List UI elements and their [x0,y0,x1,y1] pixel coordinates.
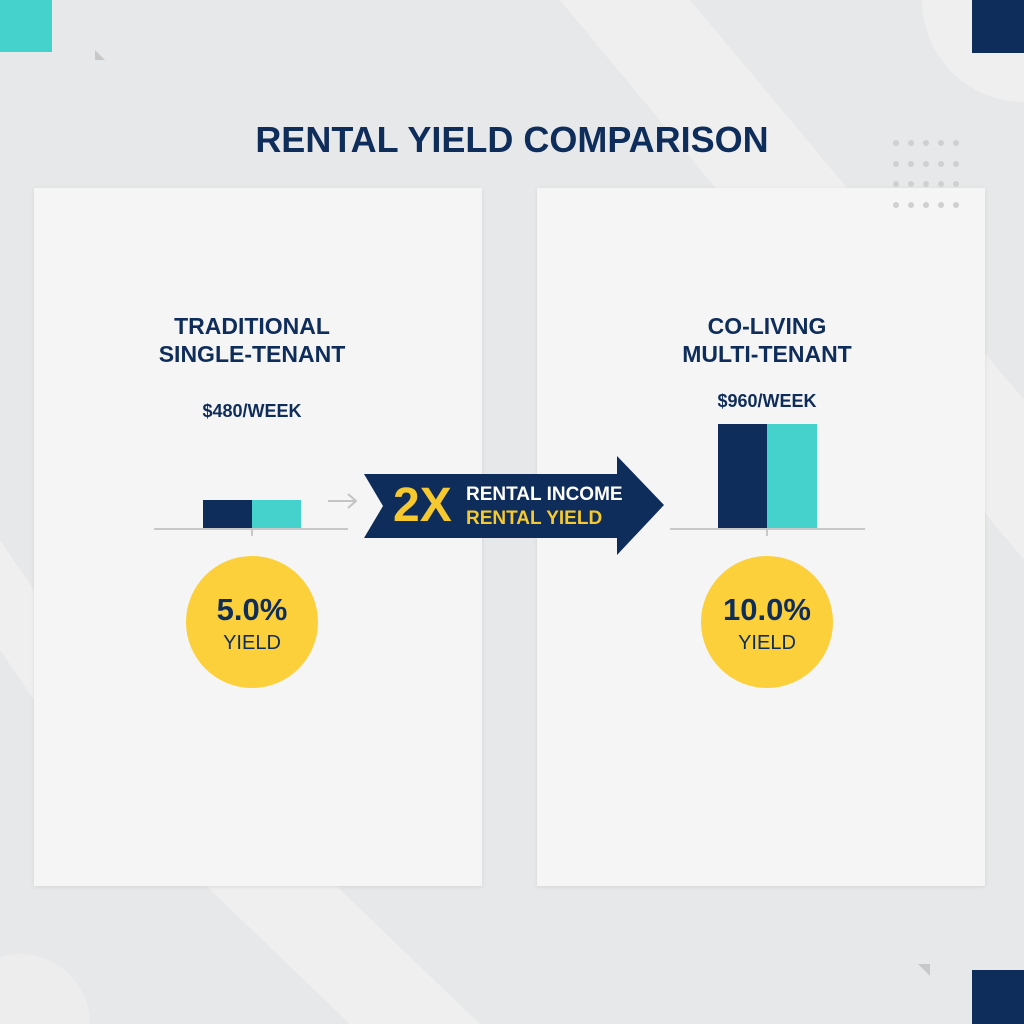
callout arrow: 2X: RENTAL YIELD [466,508,602,529]
yield circle: 10.0% [723,592,811,627]
callout arrow: 2X: RENTAL INCOME [466,484,623,505]
heading: SINGLE-TENANT [159,341,345,367]
callout arrow: 2X [364,456,664,555]
yield circle: YIELD [223,632,281,654]
bar chart [154,500,348,536]
panel: traditional [34,188,482,886]
heading [159,313,346,367]
price: $480/WEEK [202,401,302,421]
title: RENTAL YIELD COMPARISON [255,119,769,160]
dot grid [893,140,959,208]
yield circle: 5.0% [217,592,287,627]
price: $960/WEEK [717,391,817,411]
heading: CO-LIVING [708,313,826,339]
panel: co-living [537,188,985,886]
corner: navy square top [972,0,1024,53]
heading: MULTI-TENANT [682,341,852,367]
bar chart [670,424,865,536]
heading: TRADITIONAL [174,313,330,339]
heading [682,313,852,367]
corner: teal square [0,0,52,52]
icon: small arrow [328,493,358,509]
callout arrow: 2X: 2X [393,479,452,532]
yield circle [186,556,318,688]
yield circle [701,556,833,688]
corner: navy square bottom [972,970,1024,1024]
yield circle: YIELD [738,632,796,654]
